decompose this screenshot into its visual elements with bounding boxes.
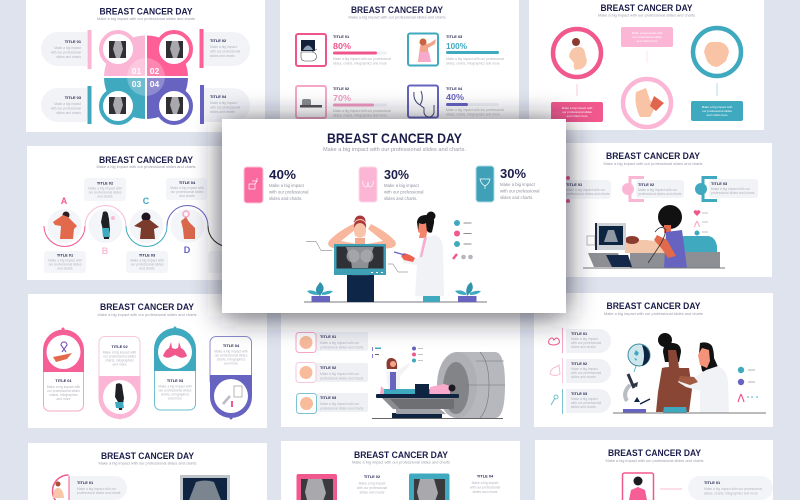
connector [660,488,682,490]
item 01 [296,332,368,352]
letters: A [61,196,68,206]
item 04: slides, charts, infographics and more [446,112,500,116]
card 03: Make a big impact with [158,384,192,388]
item 02: professional slides and charts [638,192,682,196]
heading: BREAST CANCER DAY [99,155,194,166]
text boxes [551,27,743,122]
item 01: slides and charts [571,345,596,349]
item 01: TITLE 01 [566,182,583,187]
text pills: TITLE 01 [65,39,82,44]
x-ray tile teal [409,474,450,500]
heading: BREAST CANCER DAY [600,3,693,14]
item 03: slides, charts, infographics and more [446,62,500,66]
stat 30% teal [476,166,539,202]
card 03: and more [168,396,182,400]
note boxes: and charts [139,266,155,270]
subtitle: Make a big impact with our professional slides and charts [598,14,695,18]
stat 40%: with our professional [269,190,308,194]
heading: BREAST CANCER DAY [354,450,449,461]
card 02: charts, infographics [105,358,134,362]
panel: center featured slide [222,119,566,313]
card 01: and more [57,397,71,401]
title 02 text: slides and charts [360,490,385,494]
quadrant diagram: 04 [150,79,159,89]
item 03: Make a big impact with our professional [446,57,504,61]
card 04: and more [224,362,238,366]
subtitle: Make a big impact with our professional slides and charts [98,462,197,466]
card 03: our professional slides [159,388,192,392]
panel: slide exam [534,293,773,427]
item 03: professional slides and charts [711,191,755,195]
item 01: Make a big impact with our [566,188,606,192]
note boxes: Make a big impact with [48,258,82,262]
note boxes: TITLE 04 [179,180,196,185]
stat 30% teal: Make a big impact [500,182,536,187]
note boxes: and charts [179,194,195,198]
item 01: TITLE 01 [77,480,94,485]
card 04 [210,336,252,420]
note boxes: TITLE 01 [57,252,74,258]
legend [372,346,423,362]
item 02: Make a big impact with our professional [333,109,391,113]
title 04 text: slides and charts [473,490,498,494]
ultrasound image [180,475,230,500]
illustration: plant right [455,282,481,302]
item 01: 80% [333,42,351,51]
text pills: Make a big impact [54,46,81,50]
illustration: MRI scanner [372,352,505,419]
stat 30% teal: with our professional [500,188,539,194]
item 01: Make a big impact with our [77,487,117,491]
card 02 [98,336,140,420]
note boxes: TITLE 03 [139,252,156,258]
item 01 [540,176,611,203]
note boxes: Make a big impact with [130,258,164,262]
text boxes: Make a big impact with [702,105,733,109]
letters [61,196,191,256]
card 03: TITLE 03 [167,378,184,383]
text boxes: our professional slides [702,109,732,113]
note boxes [44,178,250,273]
item 02: TITLE 02 [320,365,337,370]
item 03: TITLE 03 [446,34,463,39]
text pills [41,29,250,124]
card 03: charts, infographics [161,392,190,396]
item 02: TITLE 02 [571,361,588,366]
stat 30% teal: 30% [500,166,526,181]
note boxes: our professional slides [89,190,122,194]
item 01 [52,475,127,500]
item 03: Make a big impact [571,397,598,401]
illustration: plant left [307,282,333,302]
note boxes: and charts [57,266,73,270]
subtitle: Make a big impact with our professional slides and charts [604,312,703,316]
text boxes: and charts here [567,114,588,118]
title 02 text: TITLE 02 [364,474,381,479]
card 04: our professional slides [215,354,248,358]
text pills: with our professional [51,106,81,110]
note boxes: Make a big impact with [170,186,204,190]
note boxes: our professional slides [171,190,204,194]
card 01: Make a big impact with [47,385,80,389]
text pills: slides and charts [210,54,235,58]
panel: slide x-ray bottom center [281,441,520,500]
item 02 [296,362,368,382]
item 04: TITLE 04 [446,86,463,91]
panel: slide MRI [281,300,520,427]
item 04: 40% [446,93,464,102]
item 01: Make a big impact with our professional [704,487,762,491]
item 02: slides, charts, infographics and more [333,114,387,118]
text boxes: and charts here [637,39,658,43]
panel: slide three circles [529,0,764,130]
heading: BREAST CANCER DAY [100,6,193,18]
text boxes: and charts here [707,113,728,117]
card 04: charts, infographics [217,358,246,362]
note boxes: Make a big impact with [88,186,122,190]
item 01: TITLE 01 [704,480,721,485]
text boxes: our professional slides [562,110,592,114]
stat 30% pink: 30% [384,167,409,182]
item 03 [695,178,758,200]
card 03 [154,326,196,410]
item 01: TITLE 01 [320,334,337,339]
text pills: Make a big impact [210,101,237,105]
card 01: our professional slides [47,389,80,393]
item 03: 100% [446,42,467,51]
card 04: Make a big impact with [214,350,248,354]
text pills: with our professional [51,50,81,54]
title 02 text [357,474,387,494]
portrait tile [622,473,654,500]
subtitle: Make a big impact with our professional slides and charts [348,16,446,20]
subtitle: Make a big impact with our professional slides and charts. [323,147,466,153]
item 03: Make a big impact with our [711,187,751,191]
item 03: TITLE 03 [711,181,728,186]
stat 30% pink: Make a big impact [384,183,420,188]
item 01: professional slides and charts [566,192,610,196]
heading: BREAST CANCER DAY [351,5,444,16]
item 02: Make a big impact [571,367,598,371]
text pills: with our professional [210,50,241,54]
item 02: TITLE 02 [638,182,655,187]
subtitle: Make a big impact with our professional slides and charts [604,162,703,166]
stat 30% teal: slides and charts. [500,195,533,200]
heading: BREAST CANCER DAY [101,451,195,462]
subtitle: Make a big impact with our professional slides and charts [352,460,450,464]
item 03: professional slides and charts [320,406,364,410]
item 01: slides, charts, infographics and more [704,492,758,496]
title 04 text: TITLE 04 [477,474,494,478]
x-ray tile pink [296,474,337,500]
item 03: slides and charts [571,405,596,409]
stat 40%: 40% [269,167,296,182]
title 04 text: Make a big impact [472,481,498,485]
item 02: professional slides and charts [320,376,364,380]
stat 30% pink: slides and charts. [384,196,417,201]
item 03: TITLE 03 [320,395,337,400]
item 01 [549,328,611,353]
letters: B [102,246,109,256]
subtitle: Make a big impact with our professional slides and charts [98,313,197,317]
item 01: slides, charts, infographics and more [333,62,387,66]
illustration: patient with x-ray [306,216,408,302]
text boxes: Make a big impact with [562,106,593,110]
text pills: Make a big impact [54,102,81,106]
text pills: slides and charts [56,111,81,115]
quadrant diagram [101,32,191,123]
heading: BREAST CANCER DAY [606,151,701,162]
item 02: Make a big impact with our [638,188,678,192]
item 02: Make a big impact with our [320,372,360,376]
item 01 [296,34,391,66]
card 04: TITLE 04 [223,343,240,348]
item 04 [408,86,504,118]
item 02 [296,86,391,118]
stat 30% pink [359,167,423,202]
text pills: with our professional [210,106,241,110]
item 01: Make a big impact with our [320,341,360,345]
circle: chest [693,28,741,76]
text pills: slides and charts [210,110,235,114]
stat 40%: slides and charts. [269,196,302,201]
item 01 [688,476,773,500]
letters: C [143,196,150,206]
panel: slide portrait bottom right [535,440,773,500]
item 02: slides and charts [571,375,596,379]
item 01: TITLE 01 [571,331,588,336]
item 02: 70% [333,94,351,103]
item 01: with our professional [571,341,602,345]
subtitle: Make a big impact with our professional slides and charts [97,17,195,21]
item 01: professional slides and charts [320,346,364,350]
item 03: Make a big impact with our [320,402,360,406]
text pills: TITLE 02 [210,38,227,43]
stat 30% pink: with our professional [384,190,423,194]
card 01: charts, infographics [49,393,78,397]
subtitle: Make a big impact with our professional slides and charts [96,165,196,169]
panel: slide progress bars [280,0,519,125]
note boxes: our professional slides [49,262,82,266]
title 04 text: with our professional [470,486,500,490]
title 02 text: with our professional [357,486,387,490]
subtitle: Make a big impact with our professional slides and charts [606,459,704,463]
item 03: TITLE 03 [571,391,588,396]
note boxes: and charts [97,194,113,198]
wave line and figures [44,206,249,246]
panel: slide four arch cards [28,294,267,428]
item 01: professional slides and charts [77,491,121,495]
heading: BREAST CANCER DAY [100,302,195,313]
illustration: ground line [304,302,487,303]
text pills: TITLE 03 [65,95,82,100]
shadow: center slide [222,122,566,316]
card 01 [43,328,84,411]
letters: D [184,245,191,255]
text pills: slides and charts [56,55,81,59]
panel: slide four-quadrant [26,0,265,132]
item 01: Make a big impact with our professional [333,57,391,61]
item 02: with our professional [571,371,602,375]
text boxes: our professional slides [632,35,662,39]
illustration: doctor [394,212,444,302]
illustration: checklist icons [453,220,473,259]
title 04 text [470,474,500,494]
illustration: ultrasound exam [583,205,725,268]
card 02: our professional slides [103,354,136,358]
quadrant diagram: 03 [132,79,141,89]
quadrant diagram: 02 [150,66,159,76]
item 03 [408,34,504,66]
illustration: examination [613,333,766,414]
legend icons [694,210,708,236]
card 02: TITLE 02 [111,344,128,349]
panel: slide ultrasound image bottom left [28,443,267,500]
stat 40%: Make a big impact [269,183,305,188]
item 03: with our professional [571,401,602,405]
note boxes: our professional slides [131,262,164,266]
panel: slide ultrasound [540,143,772,277]
card 02: and more [113,362,127,366]
item 02 [622,178,684,200]
heading: BREAST CANCER DAY [608,448,702,459]
quadrant diagram: 01 [132,66,141,76]
item 01: Make a big impact [571,337,598,341]
note boxes: TITLE 02 [97,180,114,186]
item 03 [296,393,368,414]
card 01: TITLE 01 [55,378,72,383]
circle: detail [623,79,671,127]
item 03 [551,389,611,414]
circle: self check figure [553,29,601,77]
heading: BREAST CANCER DAY [606,301,701,312]
text pills: Make a big impact [210,45,237,49]
stat 40% [244,167,308,203]
card 02: Make a big impact with [103,350,136,354]
text pills: TITLE 04 [210,94,227,99]
title 02 text: Make a big impact [359,482,385,486]
item 01: TITLE 01 [333,34,350,39]
legend [738,367,758,402]
text boxes: Make a big impact with [632,31,663,35]
item 02: TITLE 02 [333,86,350,91]
heading: BREAST CANCER DAY [327,130,463,146]
panel: slide wave timeline [27,146,267,280]
item 04: Make a big impact with our professional [446,108,504,112]
item 02 [550,358,611,383]
